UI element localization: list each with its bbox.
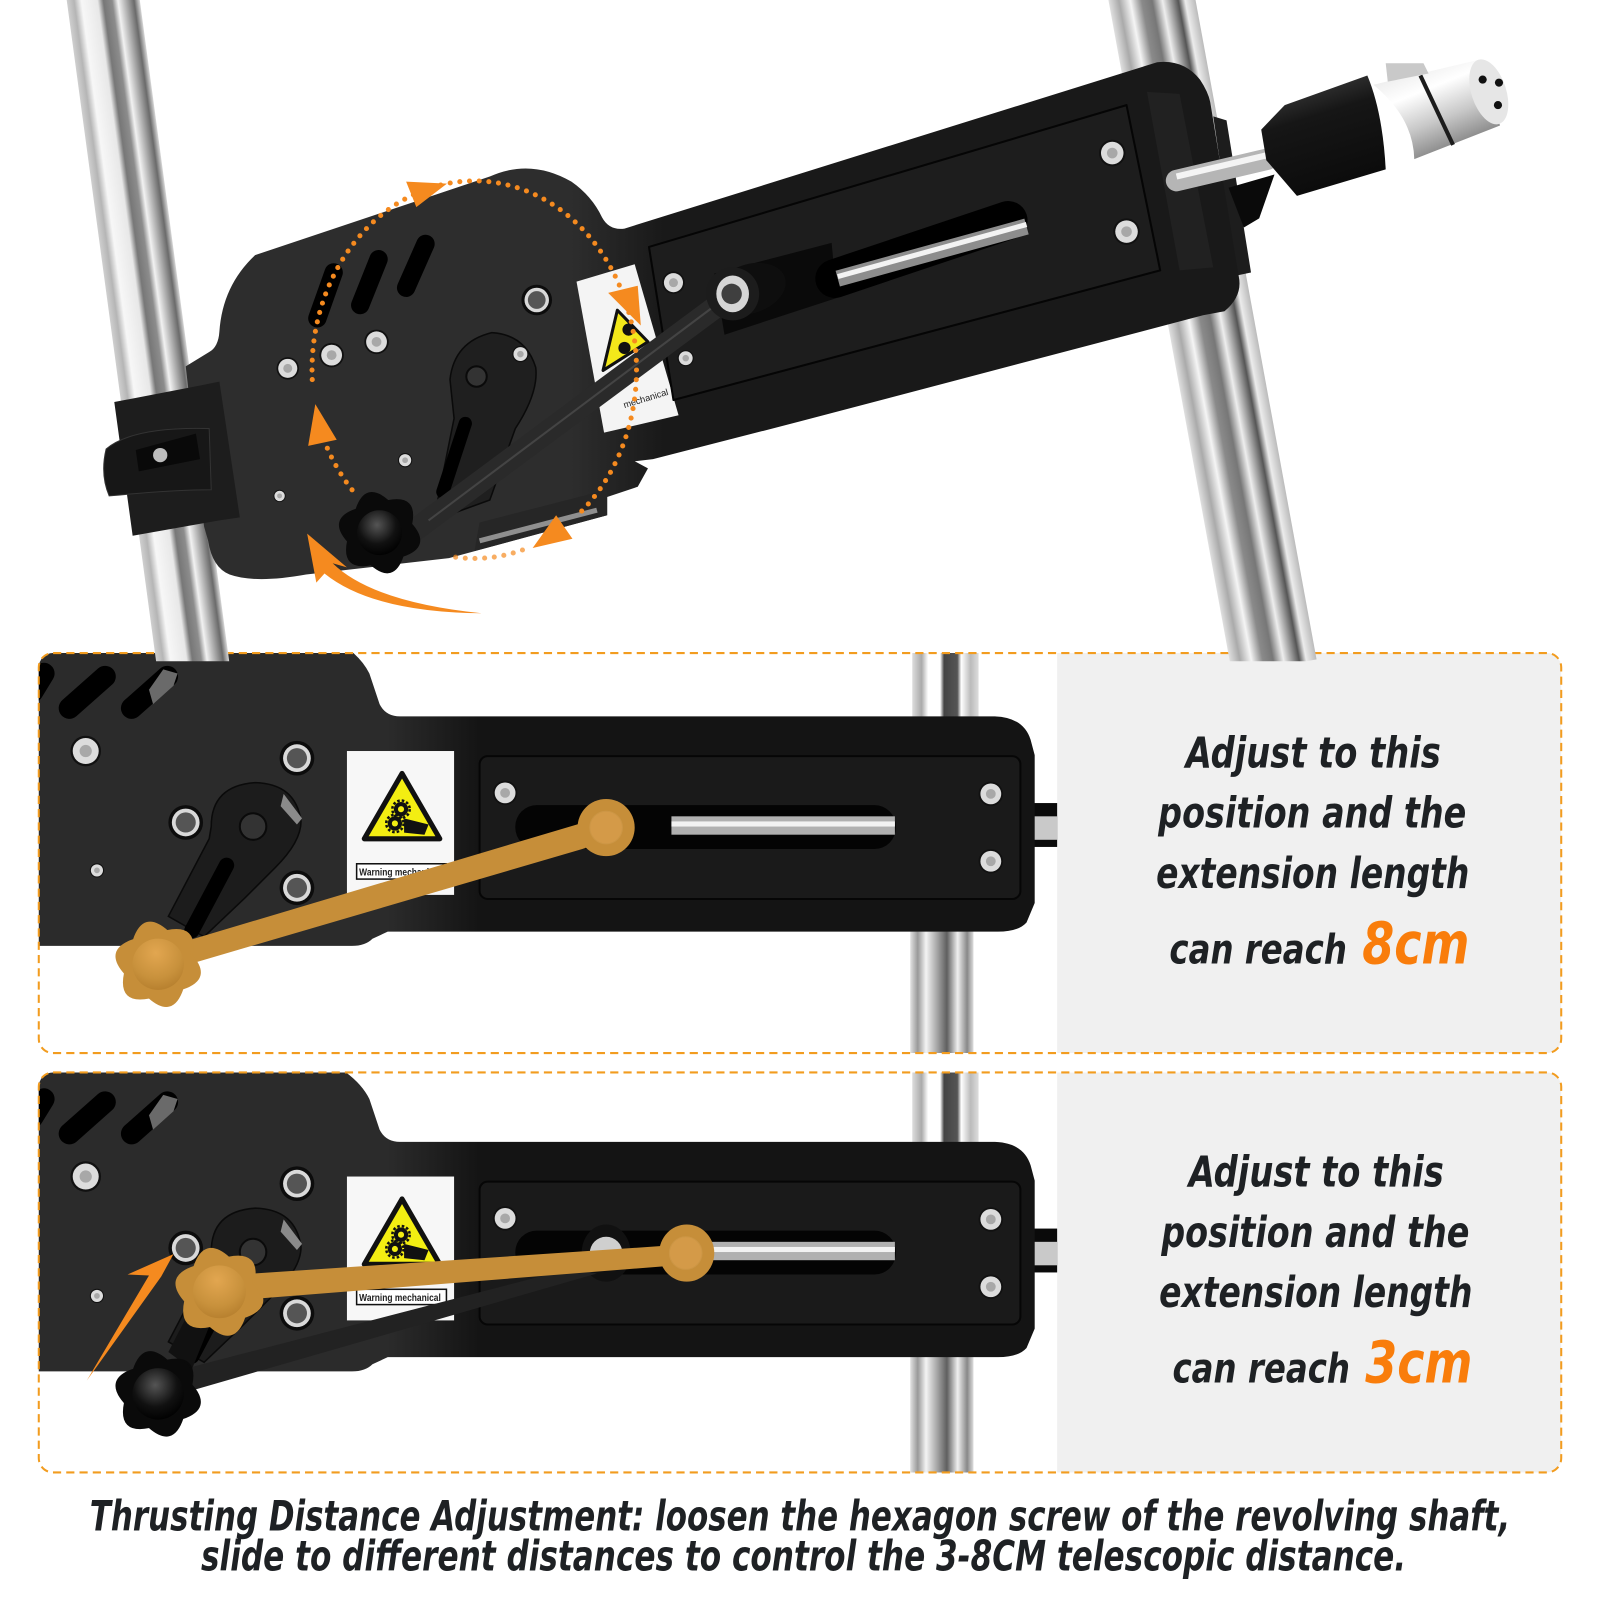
- end cap: [1147, 92, 1213, 270]
- caption: 8cm: can reach: [1169, 925, 1347, 973]
- curved arrow: [307, 534, 482, 613]
- screws: [70, 736, 1003, 905]
- slider plate: [480, 756, 1020, 899]
- rotation arrowheads: [308, 182, 641, 548]
- panel: 8cm position: [31, 633, 1561, 1066]
- screws: [273, 140, 1140, 502]
- caption: 3cm: 3cm: [1365, 1329, 1472, 1397]
- dotted rotation path: [312, 181, 637, 558]
- slot insert: [149, 669, 178, 704]
- gold link: 3cm: [167, 1224, 714, 1342]
- slot and rod: [714, 220, 1027, 335]
- right clamp: [1213, 116, 1251, 276]
- caption: 8cm: Adjust to this: [1183, 728, 1441, 778]
- crank: [434, 333, 536, 520]
- vertical chrome rod: [910, 633, 979, 1066]
- gold link: 8cm: [107, 799, 635, 1013]
- warning label: [577, 264, 679, 433]
- bottom description: [90, 1492, 1510, 1580]
- top plate: [186, 62, 1240, 579]
- mechanism: arm at 8cm: [31, 633, 1057, 1066]
- panel: 3cm position: [31, 1058, 1561, 1492]
- warning label: Warning mechanical: [359, 868, 441, 879]
- chrome rods: [65, 0, 1317, 677]
- warning label: [347, 751, 454, 895]
- caption: 3cm: position and the: [1160, 1208, 1469, 1258]
- black link and knob: [107, 1224, 631, 1442]
- shaft stub: [1031, 803, 1057, 847]
- caption: 8cm: position and the: [1157, 789, 1466, 839]
- caption: 3cm: Adjust to this: [1186, 1148, 1444, 1198]
- rail underside: [474, 490, 607, 551]
- slider slot and rod: [515, 805, 896, 849]
- caption: 3cm: extension length: [1159, 1268, 1472, 1318]
- gold hex end: [578, 799, 635, 856]
- gold knob: [167, 1242, 272, 1342]
- text panel background: 3cm: [1057, 1072, 1561, 1472]
- slider plate: [649, 105, 1160, 400]
- text panel background: 8cm: [1057, 653, 1561, 1053]
- main product photo: [65, 0, 1516, 677]
- crank: [168, 783, 302, 937]
- warning label: mechanical: [622, 387, 669, 410]
- knob: [331, 487, 428, 579]
- gold knob: [107, 916, 209, 1013]
- caption: 8cm: 8cm: [1362, 909, 1469, 977]
- panel border: 3cm: [39, 1072, 1561, 1472]
- angled slots: [317, 244, 426, 318]
- column clamp: [104, 382, 240, 536]
- mechanism: arm at 3cm: [31, 1058, 1057, 1492]
- link bar: [403, 254, 793, 539]
- angled slots: [33, 673, 167, 708]
- gold hex end: [659, 1224, 714, 1282]
- orange arrow: [87, 1254, 173, 1381]
- caption: 8cm: [1156, 728, 1469, 977]
- caption: 3cm: [1159, 1148, 1472, 1397]
- power plug: [1177, 54, 1516, 228]
- panel border: 8cm: [39, 653, 1561, 1053]
- caption: 8cm: extension length: [1156, 849, 1469, 899]
- mounting plate: [31, 638, 1035, 946]
- caption: 3cm: can reach: [1172, 1345, 1350, 1393]
